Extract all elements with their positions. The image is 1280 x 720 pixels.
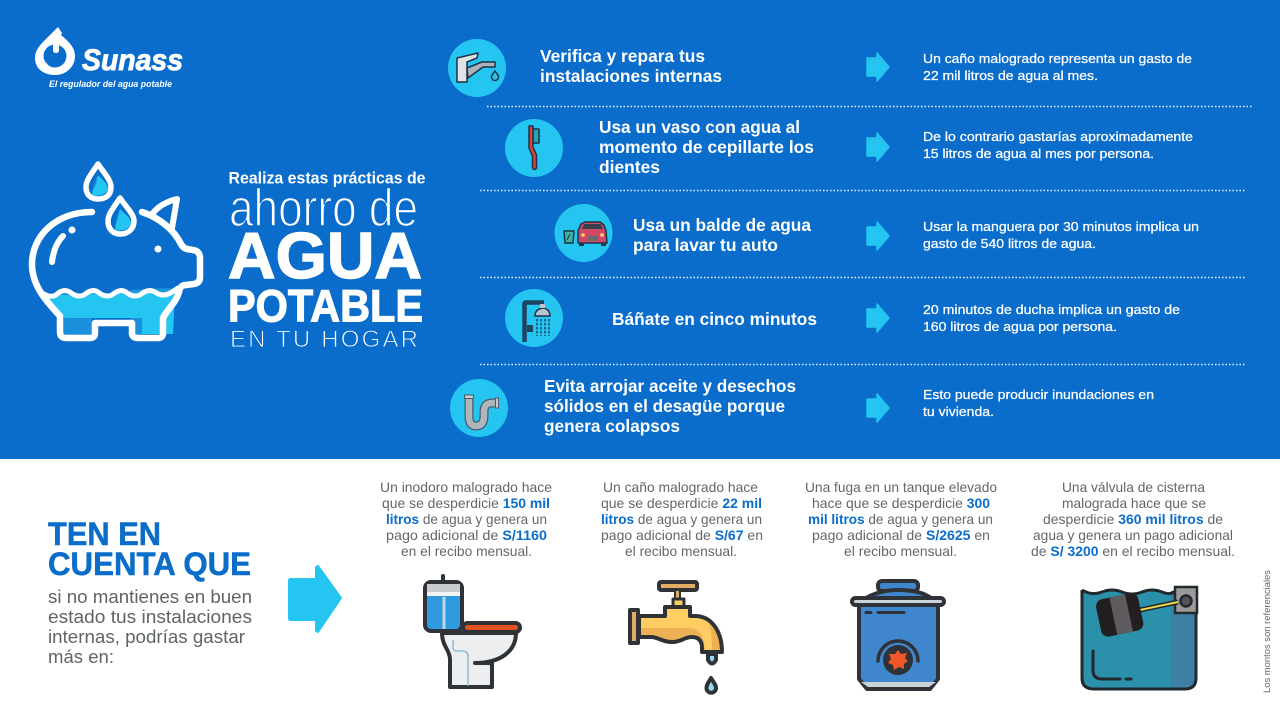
arrow	[867, 394, 889, 422]
panel: blue top background	[0, 0, 1280, 459]
heading: Verifica y repara tus	[540, 46, 705, 66]
icon: faucet in circle	[448, 39, 506, 97]
panel: white bottom background	[0, 459, 1280, 720]
text: intro to costs: si no mantienes en buen	[48, 587, 252, 607]
heading: ten en cuenta que: CUENTA QUE	[48, 546, 251, 582]
title AGUA: AGUA	[228, 219, 422, 292]
text: intro to costs: internas, podrías gastar	[48, 627, 245, 647]
logo tagline: El regulador del agua potable	[49, 79, 173, 90]
cost text: faucet: Un caño malogrado hace	[603, 480, 758, 495]
description	[923, 129, 1193, 161]
description: 22 mil litros de agua al mes.	[923, 68, 1098, 83]
icon: toilet	[425, 576, 520, 687]
text: intro to costs: más en:	[48, 647, 114, 667]
icon: car and bucket in circle	[554, 204, 612, 262]
heading: para lavar tu auto	[633, 235, 778, 255]
cost text: elevated tank: Una fuga en un tanque elevado	[805, 480, 997, 495]
arrow	[867, 133, 889, 161]
note: amounts are referential: Los montos son referenciales	[1262, 570, 1273, 693]
cost text: toilet: Un inodoro malogrado hace	[380, 480, 552, 495]
description	[923, 51, 1192, 83]
description: 15 litros de agua al mes por persona.	[923, 146, 1154, 161]
cost text: cistern valve: malograda hace que se	[1062, 496, 1206, 511]
practice row 3: bucket for washing car	[554, 204, 1199, 262]
arrow	[867, 53, 889, 81]
cost text: cistern valve: de S/ 3200 en el recibo mensual.	[1031, 544, 1235, 559]
icon: drop small	[108, 198, 134, 234]
description: gasto de 540 litros de agua.	[923, 236, 1096, 251]
cost text: elevated tank: hace que se desperdicie 300	[812, 496, 990, 511]
icon: piggy bank with water	[32, 164, 200, 338]
cost text: faucet: que se desperdicie 22 mil	[601, 496, 762, 511]
heading: dientes	[599, 157, 660, 177]
heading line 2: instalaciones internas	[540, 66, 722, 86]
heading: Báñate en cinco minutos	[612, 309, 817, 329]
cost text: toilet	[380, 480, 552, 559]
title EN TU HOGAR: EN TU HOGAR	[230, 326, 418, 353]
practice row 5: avoid oil and solid waste	[450, 376, 1154, 437]
practice row 1: repair installations	[448, 39, 1192, 97]
heading: Usa un vaso con agua al	[599, 117, 800, 137]
heading: Usa un balde de agua	[633, 215, 811, 235]
icon: drop large	[86, 164, 111, 199]
water fill	[46, 288, 175, 336]
arrow: large cyan	[289, 566, 341, 632]
icon: logo drop	[35, 27, 75, 75]
text: intro to costs	[48, 587, 252, 667]
icon: water heater tank	[852, 581, 944, 689]
pig ear	[153, 199, 177, 228]
text: intro to costs: estado tus instalaciones	[48, 607, 252, 627]
cost text: cistern valve: agua y genera un pago adicional	[1033, 528, 1233, 543]
arrow	[867, 304, 889, 332]
description	[923, 387, 1154, 419]
dotted dividers	[480, 106, 1252, 364]
practice row 2: glass for toothbrushing	[505, 117, 1193, 177]
logo wordmark: Sunass	[82, 44, 183, 77]
cost text: elevated tank: pago adicional de S/2625 en	[812, 528, 990, 543]
title block	[228, 170, 426, 353]
cost text: elevated tank: el recibo mensual.	[844, 544, 957, 559]
heading: sólidos en el desagüe porque	[544, 396, 785, 416]
description: 160 litros de agua por persona.	[923, 319, 1117, 334]
description: Un caño malogrado representa un gasto de	[923, 51, 1192, 66]
description	[923, 302, 1180, 334]
wave line	[44, 288, 178, 296]
heading: ten en cuenta que	[48, 516, 251, 582]
title POTABLE: POTABLE	[228, 280, 423, 332]
cost text: cistern valve: Una válvula de cisterna	[1062, 480, 1205, 495]
heading: ten en cuenta que: TEN EN	[48, 516, 161, 552]
icon: dripping faucet	[630, 582, 722, 693]
title ahorro de: ahorro de	[229, 179, 418, 238]
logo: Sunass	[35, 27, 183, 90]
cost text: toilet: en el recibo mensual.	[401, 544, 532, 559]
icon: drain pipe in circle	[450, 379, 508, 437]
cost text: cistern valve: desperdicie 360 mil litros de	[1043, 512, 1223, 527]
heading	[599, 117, 814, 177]
title intro: Realiza estas prácticas de	[228, 170, 426, 188]
cost text: elevated tank: mil litros de agua y genera un	[808, 512, 993, 527]
heading: momento de cepillarte los	[599, 137, 814, 157]
cost text: faucet: pago adicional de S/67 en	[601, 528, 763, 543]
cost text: toilet: pago adicional de S/1160	[386, 528, 547, 543]
description: 20 minutos de ducha implica un gasto de	[923, 302, 1180, 317]
heading	[633, 215, 811, 255]
description: De lo contrario gastarías aproximadamente	[923, 129, 1193, 144]
description: Usar la manguera por 30 minutos implica un	[923, 219, 1199, 234]
arrow	[867, 222, 889, 250]
cost text: elevated tank	[805, 480, 997, 559]
heading: genera colapsos	[544, 416, 680, 436]
pig outline	[32, 212, 200, 338]
pig details	[52, 226, 162, 262]
cost text: faucet: el recibo mensual.	[625, 544, 737, 559]
heading	[544, 376, 796, 436]
heading: Evita arrojar aceite y desechos	[544, 376, 796, 396]
icon: shower in circle	[505, 289, 563, 347]
cost text: cistern valve	[1031, 480, 1235, 559]
icon: toothbrush in circle	[505, 119, 563, 177]
description: tu vivienda.	[923, 404, 994, 419]
description: Esto puede producir inundaciones en	[923, 387, 1154, 402]
cost text: faucet: litros de agua y genera un	[601, 512, 762, 527]
description	[923, 219, 1199, 251]
cost text: toilet: litros de agua y genera un	[386, 512, 547, 527]
cost text: toilet: que se desperdicie 150 mil	[382, 496, 550, 511]
icon: cistern with float valve	[1082, 587, 1197, 689]
cost text: faucet	[601, 480, 763, 559]
practice row 4: five-minute shower	[505, 289, 1180, 347]
